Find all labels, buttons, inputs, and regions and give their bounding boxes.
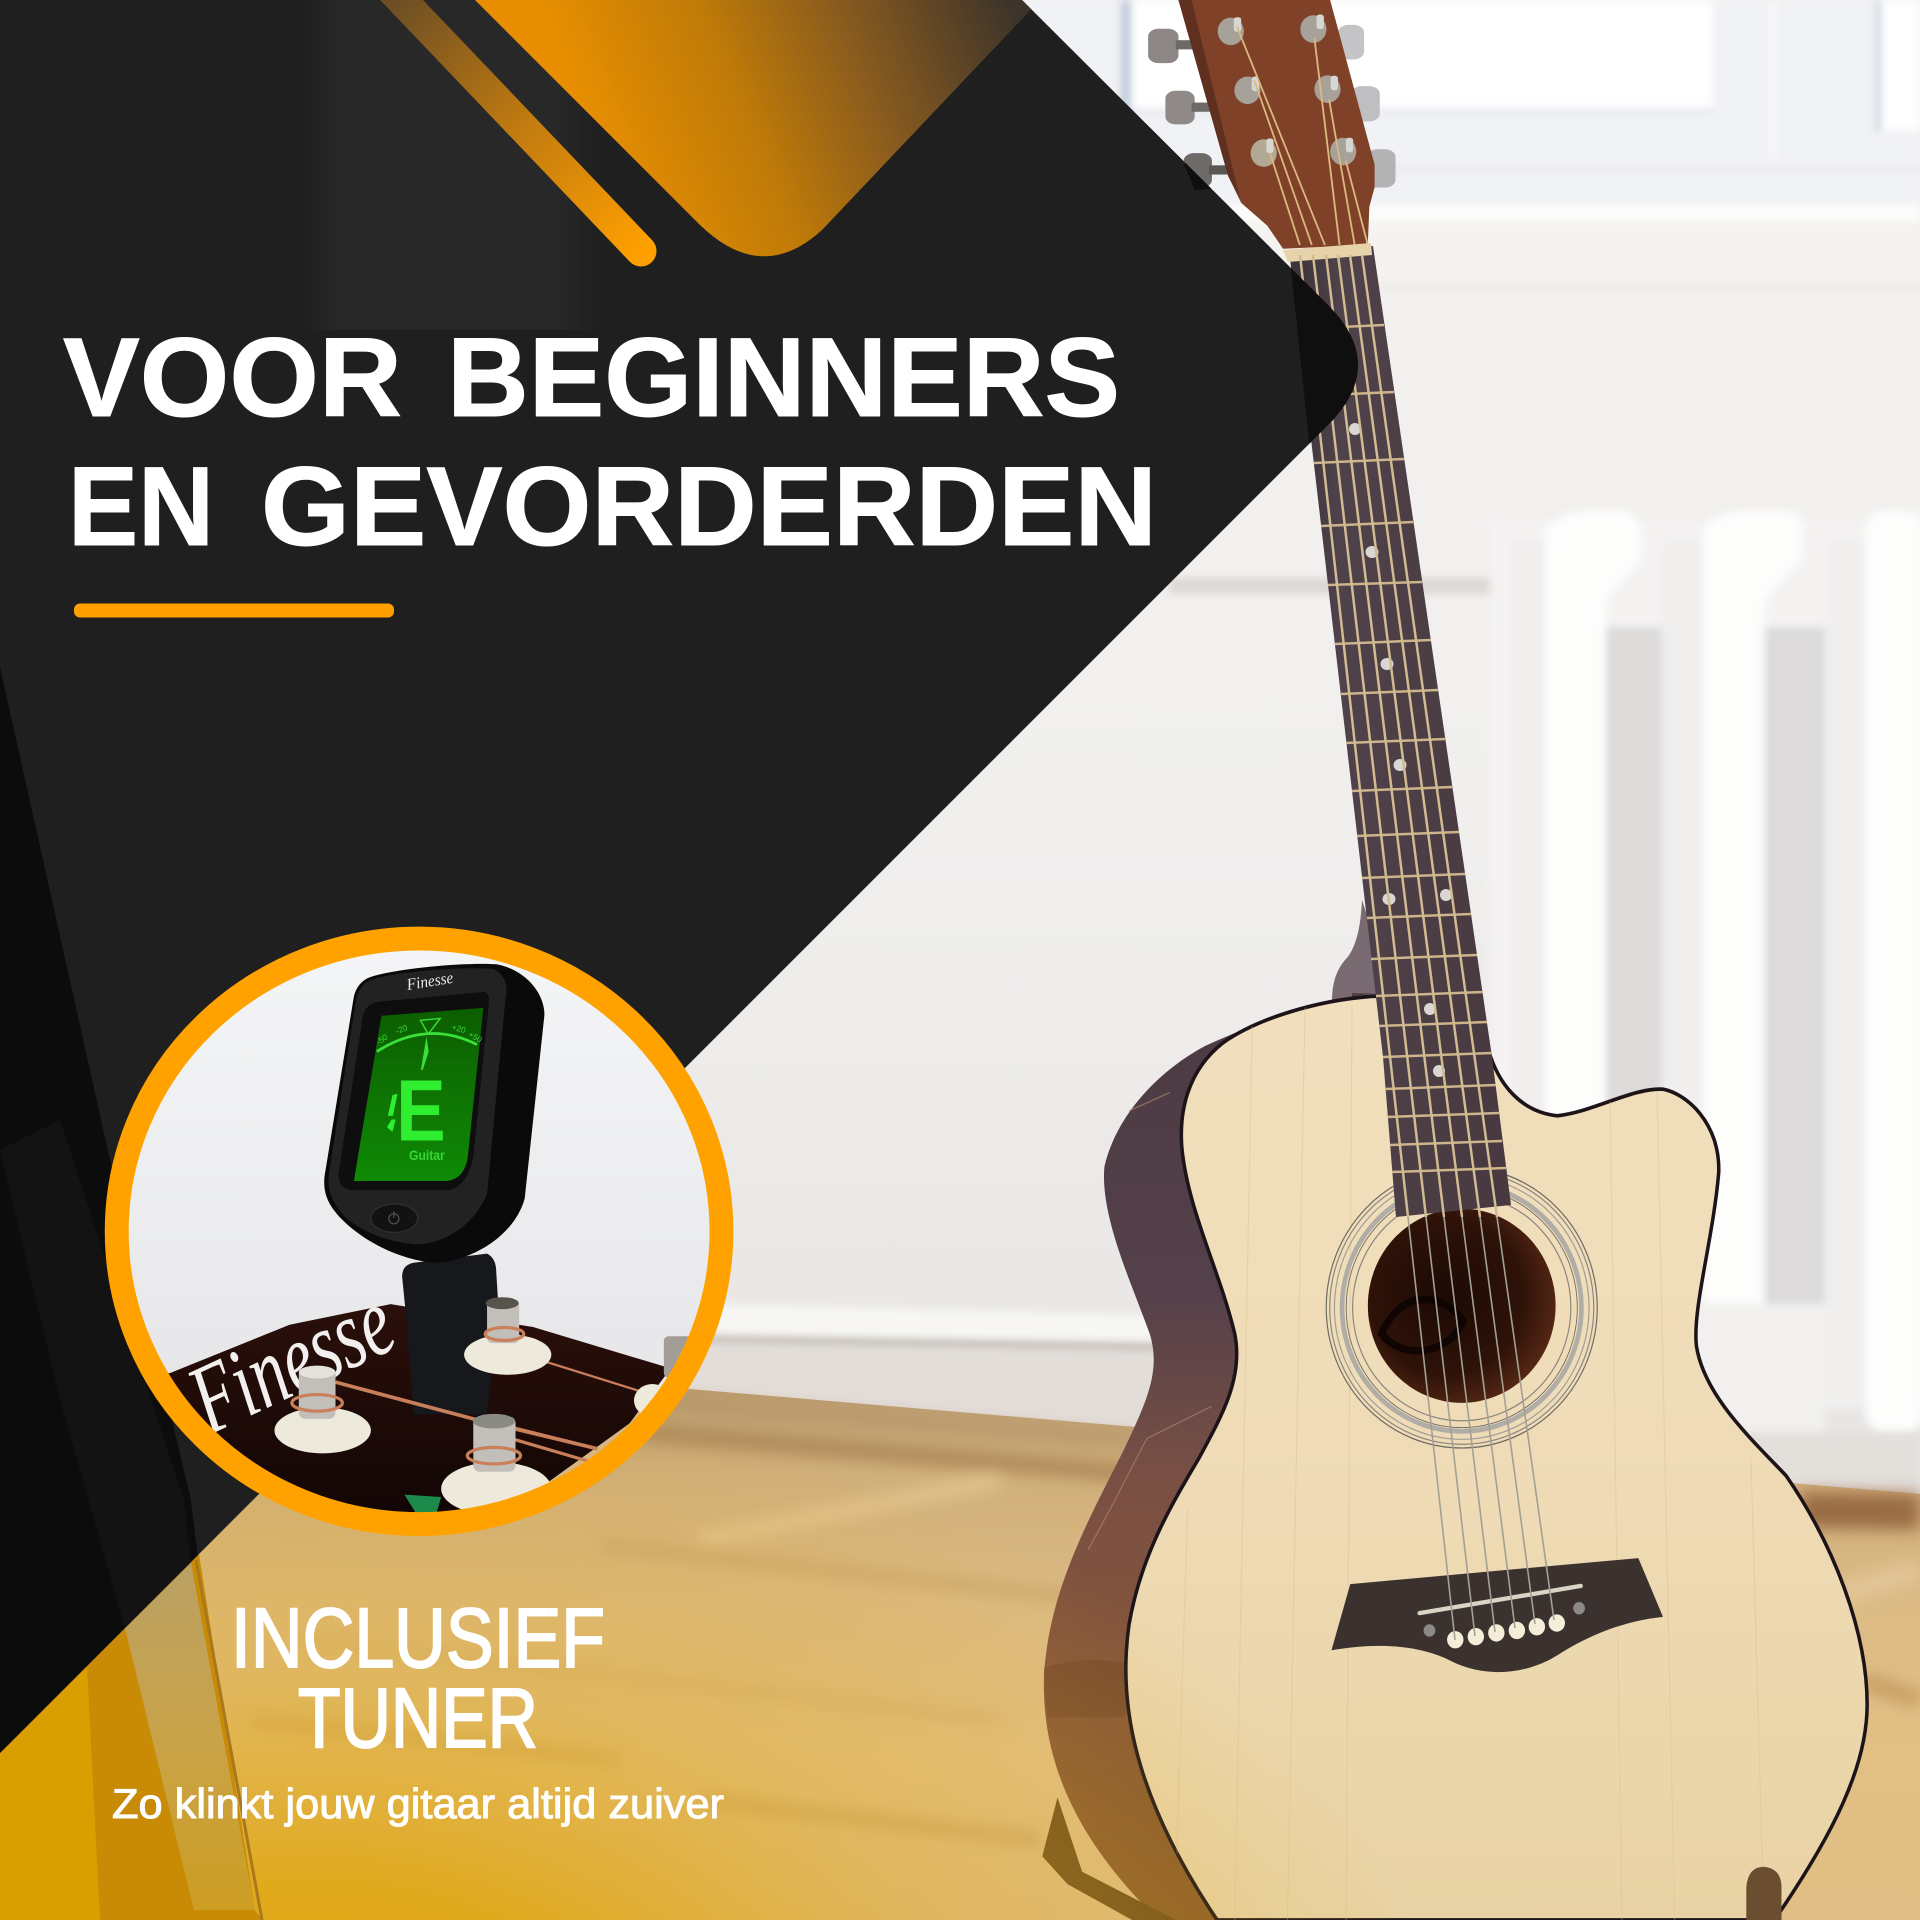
- accent diamond: [475, 0, 1040, 256]
- speaker lower part: [0, 1554, 262, 1920]
- tuner heading: TUNER: [298, 1671, 538, 1765]
- guitar neck heel: [1332, 900, 1395, 1000]
- tuning buttons: [1148, 25, 1395, 188]
- title underline: [74, 604, 394, 618]
- dark diagonal panel: [0, 0, 1358, 1753]
- guitar: [1042, 0, 1867, 1920]
- floor: [0, 1378, 1920, 1920]
- guitar headstock: [1148, 0, 1395, 249]
- tuner screen: [354, 1008, 483, 1181]
- tuner scale labels: -50: [375, 1032, 390, 1047]
- headstock: [168, 1304, 665, 1512]
- tuner scale labels: [375, 1023, 484, 1047]
- guitar body: [1042, 993, 1867, 1920]
- tuning pegs: [274, 1297, 691, 1515]
- gold gradient overlay: [0, 1370, 1920, 1920]
- side highlight lines: [1088, 1092, 1211, 1550]
- tuner note: E: [396, 1063, 446, 1160]
- title: BEGINNERS: [447, 315, 1120, 440]
- fretboard: [1289, 246, 1511, 1217]
- nut: [1283, 243, 1372, 262]
- tuner brand: Finesse: [404, 968, 455, 994]
- blurred wood background: [549, 1411, 640, 1482]
- inset photo: [128, 950, 699, 1512]
- body top: [1126, 993, 1867, 1920]
- title: GEVORDERDEN: [261, 444, 1157, 569]
- stand left: [1042, 1797, 1176, 1920]
- rosette: [1326, 1167, 1597, 1448]
- bridge: [1331, 1558, 1663, 1672]
- title: EN: [68, 444, 214, 569]
- dark panel tonal details: [0, 0, 1402, 1753]
- strings over fretboard: [1300, 255, 1497, 1217]
- floor planks: [250, 1400, 1920, 1840]
- window frame and sill: [1020, 0, 1920, 289]
- sound hole: [1368, 1209, 1556, 1403]
- green pick: [404, 1495, 441, 1513]
- tuner mode label: Guitar: [409, 1148, 445, 1163]
- tuner power button: [371, 1204, 418, 1232]
- orange ring: [117, 939, 721, 1524]
- fret inlays: [1349, 423, 1452, 1077]
- wood grain: [1176, 1006, 1763, 1920]
- clip-on tuner: [324, 964, 544, 1263]
- clip stem: [402, 1254, 499, 1414]
- tuner scale labels: +50: [467, 1030, 484, 1045]
- tuner bezel: [338, 992, 489, 1190]
- frets: [1298, 325, 1506, 1172]
- tuner circle inset: [106, 928, 749, 1543]
- tuner scale arc: [377, 1034, 477, 1052]
- tuner scale labels: -20: [394, 1023, 409, 1036]
- headstock strings: [1237, 27, 1368, 245]
- title: [63, 315, 1157, 569]
- copper strings: [336, 1362, 639, 1462]
- tuner needle: [421, 1037, 429, 1070]
- body side: [1044, 993, 1375, 1920]
- tuner centre mark: [420, 1018, 440, 1034]
- baseboard: [560, 1300, 1350, 1440]
- stand peg: [1746, 1867, 1781, 1920]
- tuner subtitle: Zo klinkt jouw gitaar altijd zuiver: [112, 1780, 724, 1827]
- tuner heading: [231, 1591, 605, 1765]
- accent stripe: [392, 0, 641, 251]
- strings over body: [1408, 1217, 1554, 1640]
- bridge pins: [1447, 1614, 1565, 1648]
- tuner heading: INCLUSIEF: [231, 1591, 605, 1685]
- tuner scale labels: +20: [451, 1023, 467, 1035]
- radiator: [1170, 511, 1920, 1496]
- tuning posts: [1218, 15, 1356, 167]
- brand script: Finesse: [172, 1267, 410, 1455]
- title: VOOR: [63, 315, 402, 440]
- hole interior swirl: [1381, 1300, 1463, 1351]
